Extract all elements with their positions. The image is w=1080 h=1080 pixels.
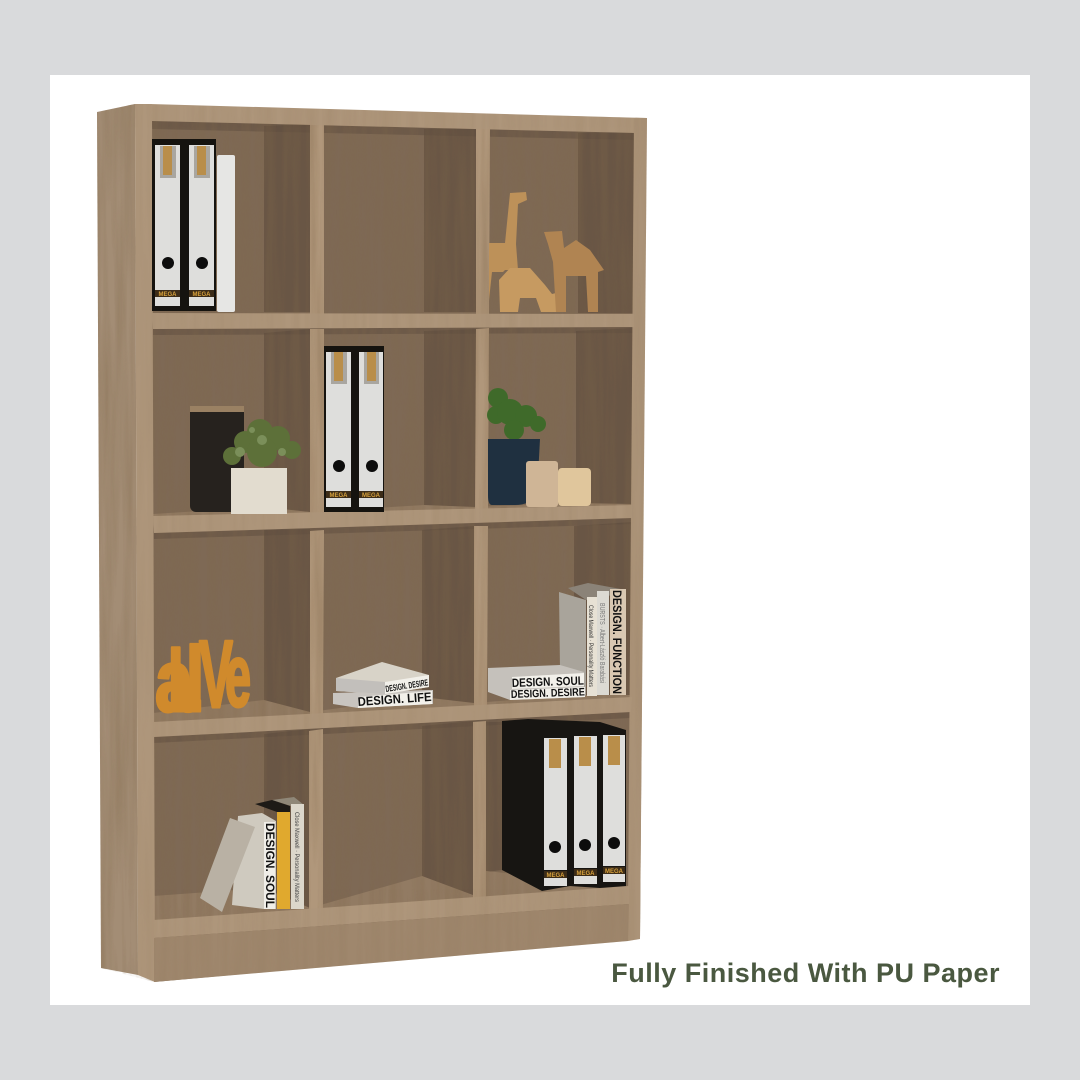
vase and candles	[487, 388, 591, 507]
alive wooden letters: V	[199, 621, 233, 728]
binders middle: MEGA	[330, 493, 348, 499]
binders top left: MEGA	[158, 292, 177, 298]
alive wooden letters: L	[168, 629, 202, 731]
under-shelf shadows	[152, 121, 636, 743]
books right: DESIGN. DESIRE	[511, 686, 585, 701]
wood grain on front boards	[104, 968, 152, 982]
back of bookcase	[150, 105, 646, 982]
leaning books bottom	[200, 797, 304, 912]
right post	[628, 118, 647, 941]
wood grain on back	[97, 104, 647, 982]
black binders bottom right: MEGA	[576, 871, 595, 877]
plinth	[154, 904, 629, 982]
shelf top surfaces	[153, 503, 632, 921]
books right: BURSTS · Albert-László Barabási	[598, 603, 605, 683]
books right: DESIGN. FUNCTION	[610, 590, 624, 694]
white panel	[50, 75, 1030, 1005]
books right: DESIGN. SOUL	[512, 673, 584, 690]
black binders bottom right: MEGA	[605, 869, 624, 875]
black binders bottom right	[502, 719, 626, 891]
binders middle: MEGA	[362, 493, 381, 499]
caption: Fully Finished With PU Paper	[611, 958, 1000, 988]
binders top left: MEGA	[192, 292, 211, 298]
front of left upright	[135, 104, 155, 982]
alive wooden letters: I	[186, 624, 204, 729]
shaded inner side walls	[264, 124, 635, 910]
bookcase body	[97, 104, 647, 982]
binders top left	[152, 139, 235, 312]
bookcase illustration	[97, 104, 647, 982]
wooden animal figures	[489, 192, 604, 312]
vertical dividers	[309, 124, 490, 912]
alive wooden letters	[155, 621, 251, 731]
binders middle	[324, 346, 384, 512]
leaning books bottom: Close Maxwell · Personality Matters	[293, 812, 299, 902]
books right: Close Maxwell · Personality Matters	[587, 605, 593, 687]
stacked books centre	[333, 662, 433, 709]
alive wooden letters: a	[155, 631, 194, 730]
leaning books bottom: DESIGN. SOUL	[263, 823, 277, 908]
black binders bottom right: MEGA	[546, 873, 565, 879]
jar and plant	[190, 406, 301, 514]
stacked books centre: DESIGN. DESIRE	[385, 677, 429, 694]
books right	[488, 583, 626, 701]
top board	[150, 104, 647, 133]
stacked books centre: DESIGN. LIFE	[357, 690, 432, 709]
shelf front edges	[152, 313, 634, 938]
left side panel	[97, 104, 138, 975]
alive wooden letters: e	[225, 626, 251, 725]
